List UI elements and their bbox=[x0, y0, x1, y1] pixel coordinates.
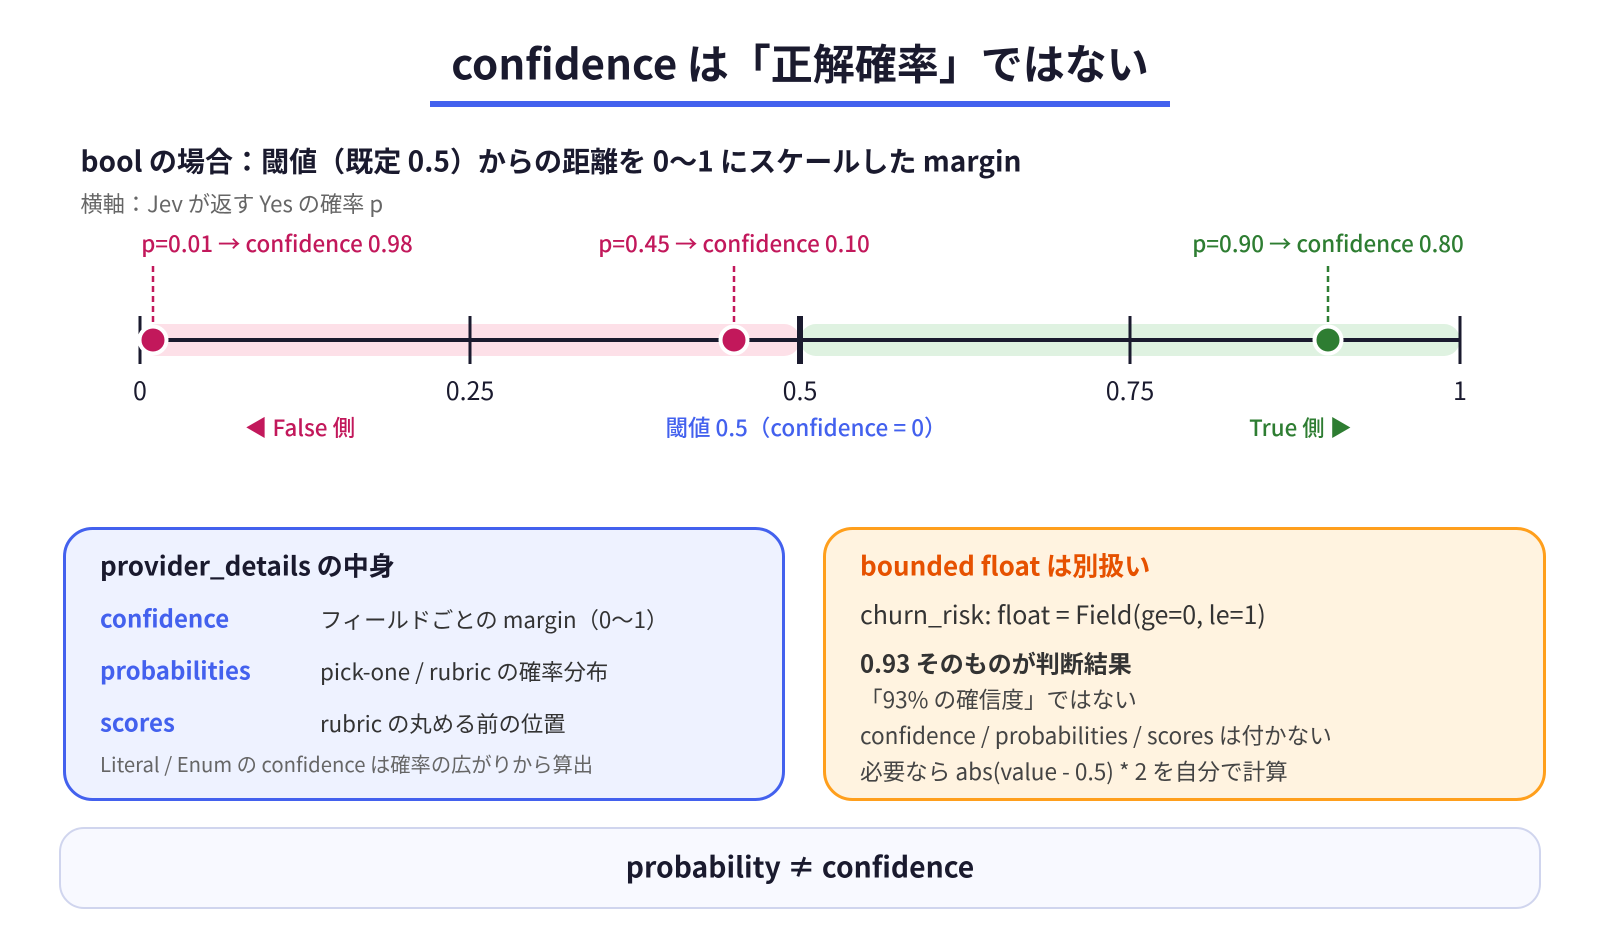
section heading: bool の場合：閾値（既定 0.5）からの距離を 0〜1 にスケールした margin bbox=[80, 140, 1022, 180]
axis ticks bbox=[140, 316, 1460, 364]
false side label: ◀ False 側 bbox=[245, 411, 355, 443]
row: probabilities: probabilities bbox=[100, 652, 251, 686]
axis caption: 横軸：Jev が返す Yes の確率 p bbox=[80, 187, 383, 219]
marker p=0.90: p=0.90 → confidence 0.80 bbox=[1192, 227, 1464, 259]
detail lines bbox=[860, 682, 1332, 787]
panel note: Literal / Enum の confidence は確率の広がりから算出 bbox=[100, 748, 593, 778]
tick labels: 0.5 bbox=[783, 372, 817, 408]
title: confidence は「正解確率」ではない bbox=[451, 32, 1149, 92]
detail lines: 必要なら abs(value - 0.5) * 2 を自分で計算 bbox=[860, 754, 1288, 787]
axis line bbox=[140, 338, 1460, 342]
row: probabilities bbox=[100, 652, 608, 687]
tick labels: 1 bbox=[1453, 372, 1467, 408]
tick labels bbox=[133, 372, 1467, 408]
marker p=0.01 bbox=[140, 227, 413, 354]
tick labels: 0 bbox=[133, 372, 147, 408]
marker p=0.45 bbox=[598, 227, 870, 354]
panel: summary banner bbox=[60, 828, 1540, 908]
true side label: True 側 ▶ bbox=[1249, 411, 1352, 443]
row: confidence: confidence bbox=[100, 600, 229, 634]
tick labels: 0.75 bbox=[1106, 372, 1154, 408]
tick labels: 0.25 bbox=[446, 372, 494, 408]
row: scores: scores bbox=[100, 704, 175, 738]
row: probabilities: pick-one / rubric の確率分布 bbox=[320, 655, 608, 687]
panel heading: provider_details の中身 bbox=[100, 546, 395, 584]
true zone band bbox=[800, 324, 1460, 356]
emphasis line: 0.93 そのものが判断結果 bbox=[860, 644, 1132, 680]
row: scores: rubric の丸める前の位置 bbox=[320, 707, 566, 739]
false zone band bbox=[140, 324, 800, 356]
marker p=0.01: p=0.01 → confidence 0.98 bbox=[141, 227, 413, 259]
panel: provider_details bbox=[64, 528, 784, 800]
threshold label: 閾値 0.5（confidence = 0） bbox=[665, 411, 947, 443]
panel: bounded float bbox=[824, 528, 1544, 800]
row: scores bbox=[100, 704, 566, 739]
marker p=0.90 bbox=[1192, 227, 1464, 354]
row: confidence bbox=[100, 600, 668, 635]
detail lines: 「93% の確信度」ではない bbox=[860, 682, 1137, 715]
detail lines: confidence / probabilities / scores は付かない bbox=[860, 718, 1332, 751]
number line chart bbox=[133, 227, 1467, 443]
code line: churn_risk: float = Field(ge=0, le=1) bbox=[860, 596, 1266, 632]
marker p=0.45: p=0.45 → confidence 0.10 bbox=[598, 227, 870, 259]
panel heading: bounded float は別扱い bbox=[860, 546, 1150, 584]
row: confidence: フィールドごとの margin（0〜1） bbox=[320, 603, 668, 635]
summary text: probability ≠ confidence bbox=[626, 846, 974, 886]
